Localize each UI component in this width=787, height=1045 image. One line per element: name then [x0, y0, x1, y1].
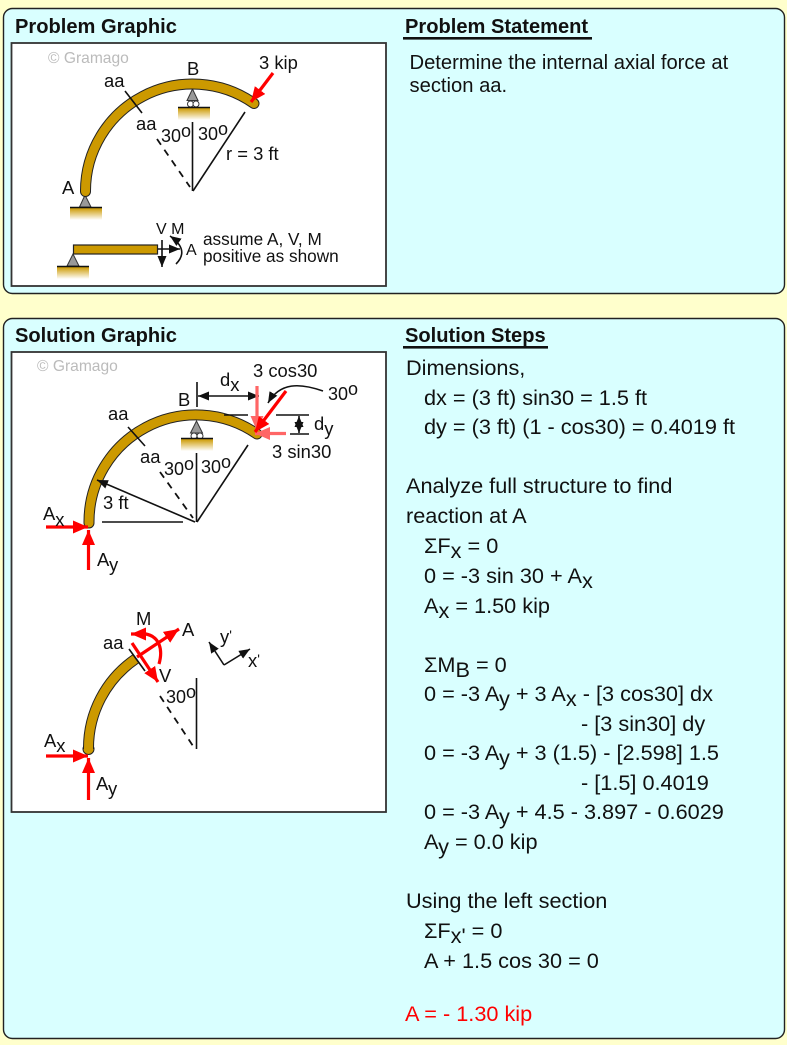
- labels: lower diagram: y: [108, 778, 118, 799]
- text: solution steps: A: [424, 829, 438, 854]
- labels: upper diagram: y: [324, 418, 334, 439]
- sign convention diagram: A: [186, 242, 197, 259]
- labels: upper diagram: 30: [201, 457, 221, 477]
- text: solution steps: x: [451, 538, 462, 563]
- labels: [62, 52, 298, 198]
- curved beam: [85, 84, 254, 192]
- heading: solution steps: Solution Steps: [405, 325, 546, 347]
- panel: problem: [4, 8, 784, 294]
- axes x' y': [209, 642, 250, 665]
- section line aa: [125, 91, 142, 113]
- labels: lower diagram: x: [248, 650, 257, 671]
- frame: solution graphic: [12, 352, 386, 812]
- labels: lower diagram: aa: [103, 632, 124, 653]
- text: solution steps: + 4.5 - 3.897 - 0.6029: [510, 799, 724, 824]
- watermark: © Gramago: [48, 50, 129, 67]
- labels: upper diagram: [43, 360, 358, 575]
- text: solution steps: ΣF: [424, 533, 451, 558]
- geometry lines: [157, 112, 245, 191]
- text: solution steps: Analyze full structure to find: [406, 473, 672, 498]
- labels: aa: [104, 70, 125, 91]
- text: solution steps: [406, 355, 735, 973]
- arrow: Ax: [46, 525, 88, 529]
- panel: solution: [4, 318, 784, 1038]
- labels: lower diagram: ': [257, 651, 260, 667]
- geometry lines: [160, 678, 196, 749]
- labels: upper diagram: aa: [108, 403, 129, 424]
- text: solution steps: ΣF: [424, 918, 451, 943]
- text: solution steps: = 0: [470, 652, 507, 677]
- text: solution steps: 0 = -3 sin 30 + A: [424, 563, 582, 588]
- labels: upper diagram: y: [109, 554, 119, 575]
- frame: problem graphic: [12, 43, 386, 286]
- text: solution steps: ΣM: [424, 652, 455, 677]
- dimension: dx: [197, 382, 259, 407]
- labels: upper diagram: x: [230, 374, 239, 395]
- text: solution steps: B: [455, 657, 470, 682]
- arrow: radius 3 ft: [97, 480, 195, 522]
- heading: problem statement: Problem Statement: [405, 16, 588, 38]
- text: solution steps: y: [499, 686, 510, 711]
- sign convention diagram: V M: [156, 221, 184, 238]
- arrow: 3 kip load: [251, 73, 273, 102]
- labels: lower diagram: o: [186, 682, 196, 702]
- text: problem statement: section aa.: [410, 75, 507, 97]
- labels: lower diagram: y: [220, 626, 229, 647]
- labels: lower diagram: A: [96, 773, 108, 794]
- text: solution steps: x: [438, 598, 449, 623]
- heading: solution graphic: Solution Graphic: [15, 325, 177, 347]
- text: solution steps: 0 = -3 A: [424, 740, 499, 765]
- arrow: A: [137, 629, 179, 657]
- labels: o: [181, 121, 191, 141]
- labels: lower diagram: x: [56, 735, 65, 756]
- watermark: © Gramago: [37, 358, 118, 375]
- text: solution steps: - [3 sin30] dy: [581, 711, 705, 736]
- text: solution steps: dx = (3 ft) sin30 = 1.5 ft: [424, 385, 647, 410]
- labels: upper diagram: 3 ft: [103, 492, 129, 513]
- labels: lower diagram: M: [136, 608, 151, 629]
- dimension: dy: [224, 415, 309, 434]
- arrow: 30 degree leader: [268, 386, 323, 403]
- text: solution steps: y: [499, 745, 510, 770]
- text: solution steps: dy = (3 ft) (1 - cos30) = 0.4019 ft: [424, 414, 735, 439]
- labels: B: [187, 58, 199, 79]
- sign convention diagram: [57, 221, 339, 279]
- text: solution steps: x: [582, 568, 593, 593]
- text: solution steps: = 0: [462, 533, 498, 558]
- labels: lower diagram: [44, 608, 260, 799]
- text: solution steps: reaction at A: [406, 503, 527, 528]
- labels: upper diagram: aa: [140, 446, 161, 467]
- text: solution steps: 0 = -3 A: [424, 799, 499, 824]
- sign convention diagram: positive as shown: [203, 246, 339, 266]
- text: solution steps: y: [499, 804, 510, 829]
- sign convention diagram: assume A, V, M: [203, 229, 322, 249]
- labels: upper diagram: A: [97, 549, 109, 570]
- labels: upper diagram: d: [314, 413, 324, 434]
- text: solution steps: = 0.0 kip: [449, 829, 538, 854]
- arrow: Ax: [46, 754, 88, 758]
- labels: lower diagram: A: [182, 619, 195, 640]
- text: solution steps: - [1.5] 0.4019: [581, 770, 709, 795]
- labels: upper diagram: A: [43, 503, 55, 524]
- labels: lower diagram: A: [44, 730, 56, 751]
- heading: problem graphic: Problem Graphic: [15, 16, 177, 38]
- labels: upper diagram: 30: [328, 384, 348, 404]
- text: solution steps: + 3 A: [510, 681, 566, 706]
- text: solution steps: 0 = -3 A: [424, 681, 499, 706]
- labels: A: [62, 177, 75, 198]
- geometry lines: [102, 445, 248, 522]
- text: solution steps: - [3 cos30] dx: [577, 681, 713, 706]
- labels: o: [218, 119, 228, 139]
- support: B: [178, 89, 210, 120]
- labels: upper diagram: 30: [164, 459, 184, 479]
- labels: 30: [198, 124, 218, 144]
- labels: aa: [136, 113, 157, 134]
- text: solution steps: + 3 (1.5) - [2.598] 1.5: [510, 740, 719, 765]
- labels: upper diagram: 3 sin30: [272, 441, 331, 462]
- text: solution steps: A + 1.5 cos 30 = 0: [424, 948, 599, 973]
- labels: upper diagram: o: [348, 379, 358, 399]
- labels: upper diagram: B: [178, 389, 190, 410]
- support: A: [70, 195, 102, 220]
- arrow: Ay: [87, 530, 90, 570]
- left section beam: [83, 659, 136, 754]
- text: solution steps: x': [451, 923, 466, 948]
- text: solution steps: x: [566, 686, 577, 711]
- answer: A = - 1.30 kip: [405, 1001, 532, 1026]
- curved beam: [89, 415, 257, 523]
- labels: 30: [161, 126, 181, 146]
- text: solution steps: Using the left section: [406, 888, 607, 913]
- labels: lower diagram: ': [229, 627, 232, 643]
- text: solution steps: Dimensions,: [406, 355, 525, 380]
- labels: upper diagram: o: [184, 454, 194, 474]
- labels: 3 kip: [259, 52, 298, 73]
- text: problem statement: Determine the internal axial force at: [410, 52, 728, 74]
- labels: lower diagram: 30: [166, 687, 186, 707]
- text: solution steps: = 0: [466, 918, 502, 943]
- labels: lower diagram: V: [159, 665, 172, 686]
- support: B: [181, 421, 213, 451]
- labels: upper diagram: 3 cos30: [253, 360, 317, 381]
- section line aa: [128, 427, 145, 446]
- labels: r = 3 ft: [226, 143, 279, 164]
- text: solution steps: A: [424, 593, 438, 618]
- labels: upper diagram: o: [221, 452, 231, 472]
- arrow: V: [132, 643, 158, 682]
- arrow: M: [131, 634, 161, 664]
- text: solution steps: = 1.50 kip: [449, 593, 550, 618]
- labels: upper diagram: d: [220, 369, 230, 390]
- arrow: Ay: [87, 758, 90, 800]
- arrow: force components: [255, 386, 286, 434]
- labels: upper diagram: x: [55, 509, 64, 530]
- section cut: [129, 649, 145, 671]
- text: solution steps: y: [438, 834, 449, 859]
